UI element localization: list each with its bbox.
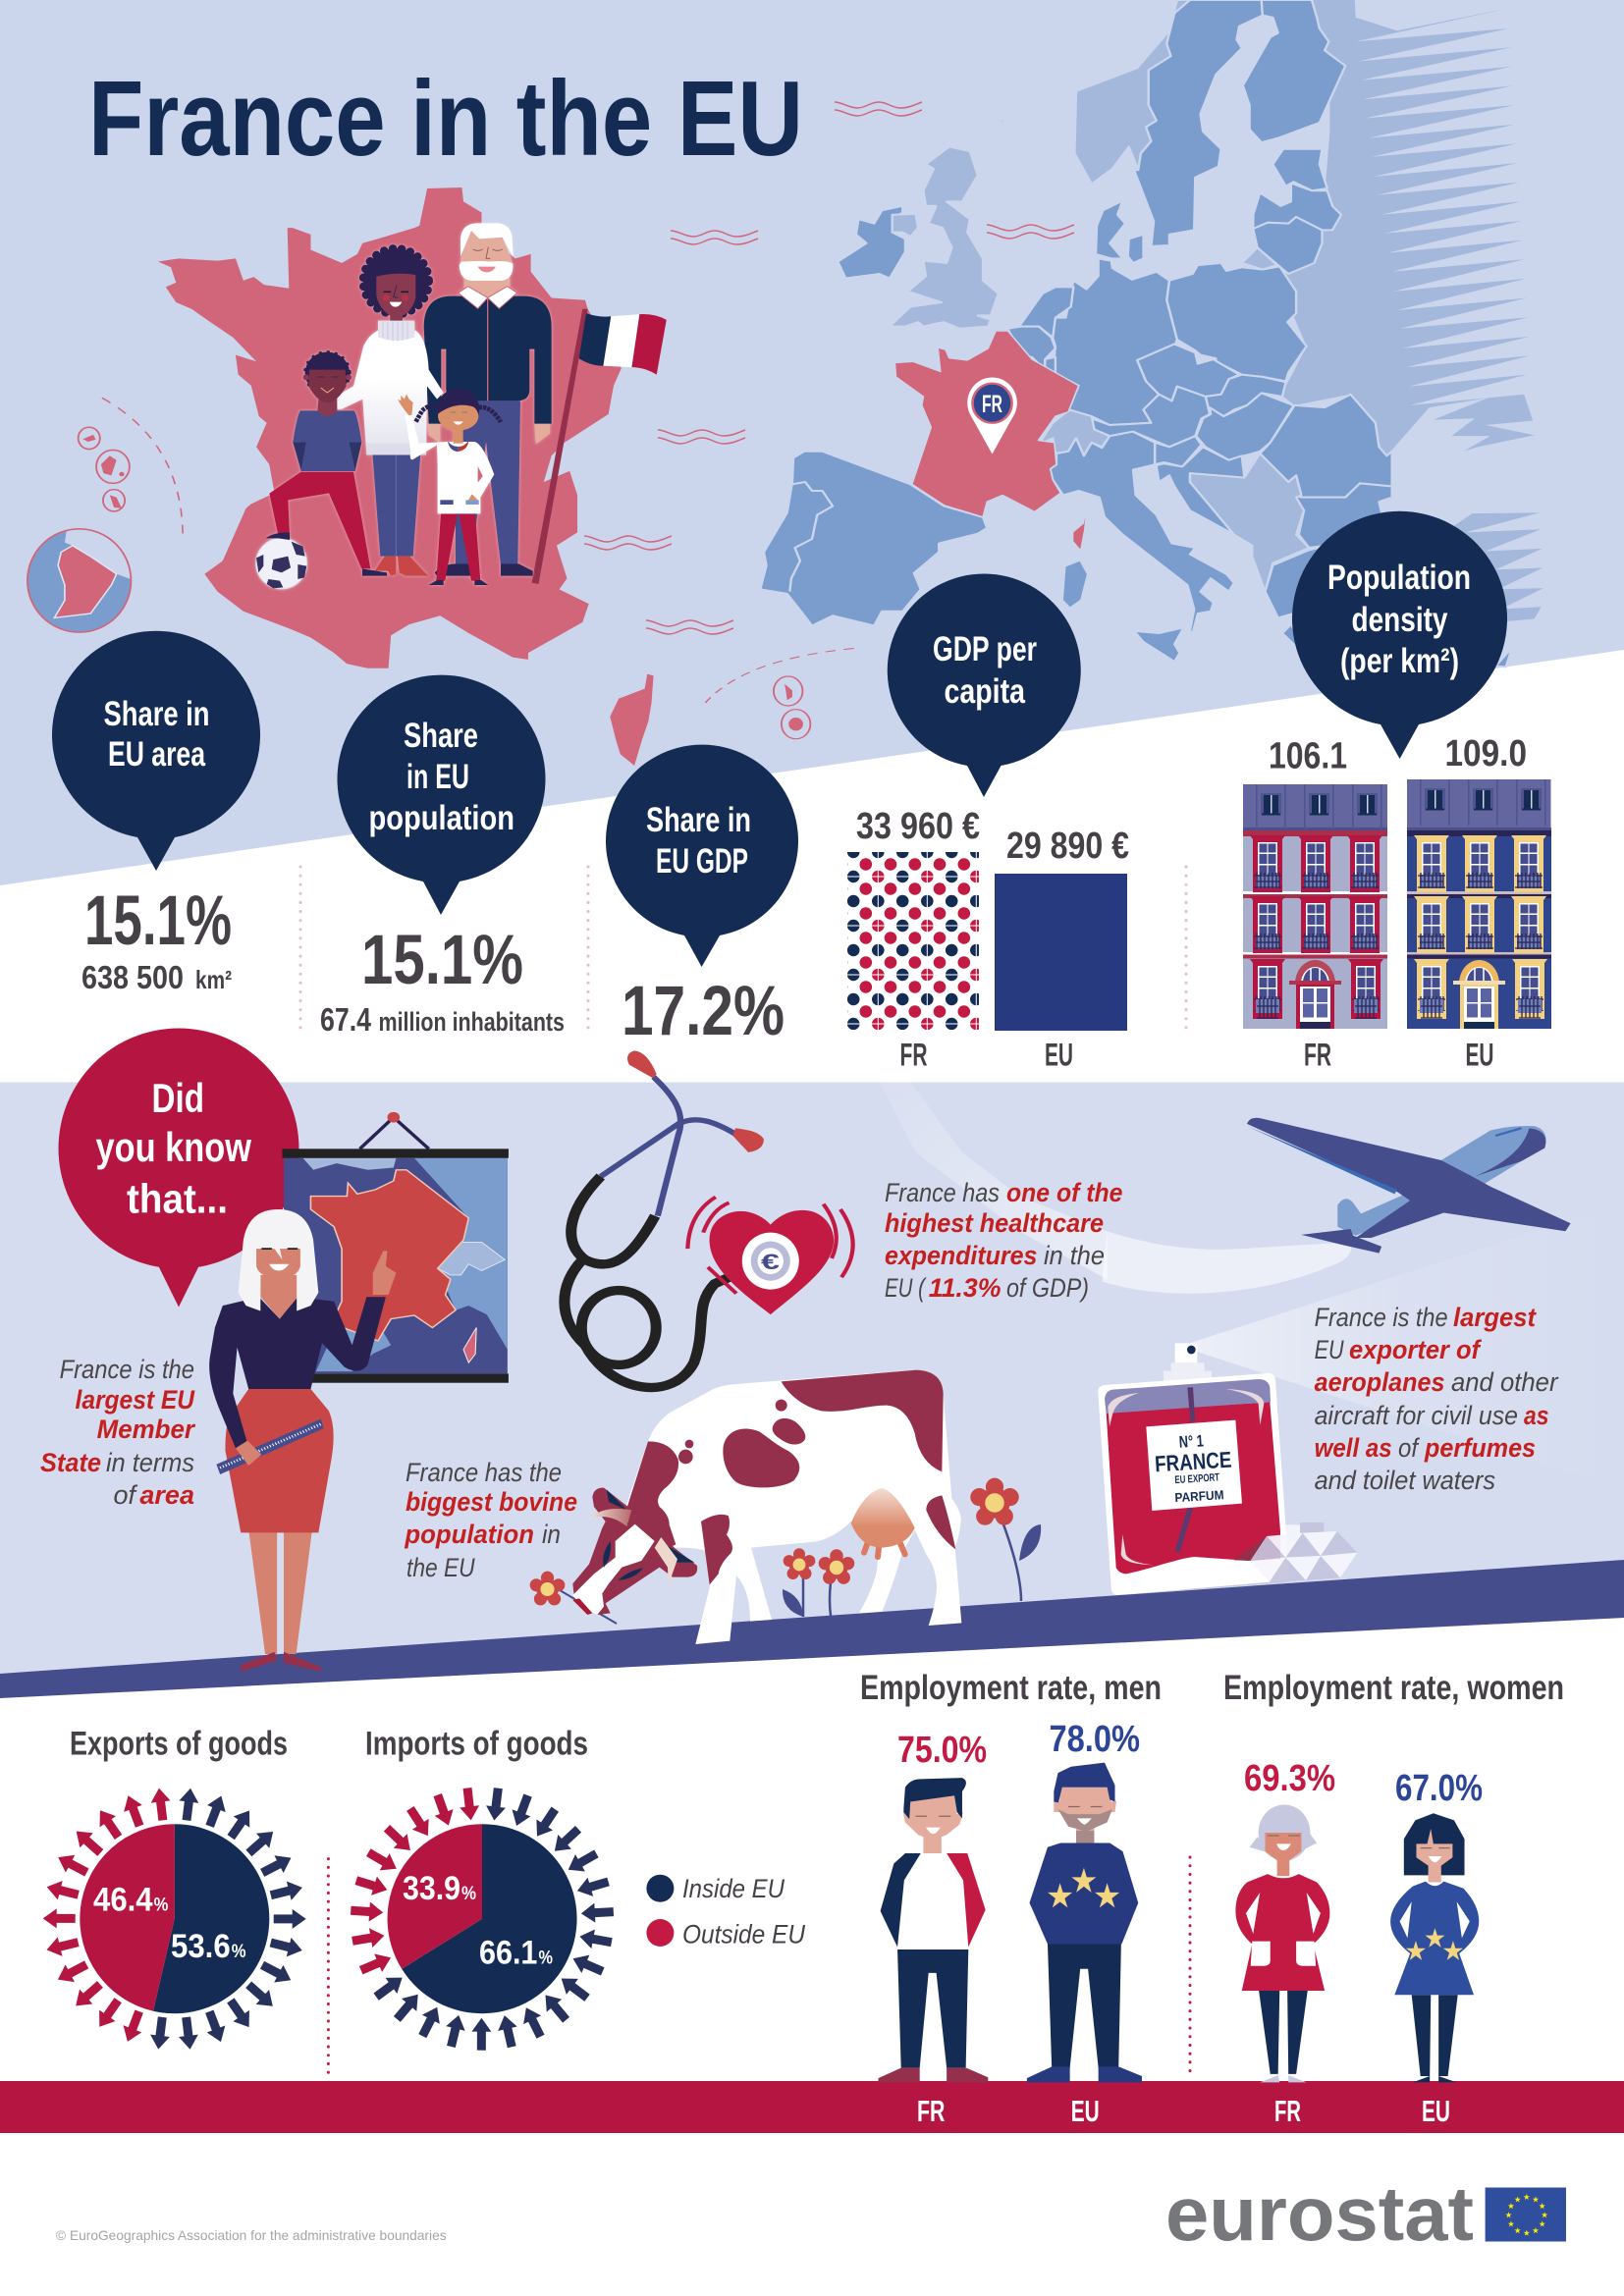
heart with euro xyxy=(687,1197,853,1314)
Turkey hatched edge xyxy=(1454,512,1543,622)
udder xyxy=(851,1488,915,1557)
perfume label text: FRANCE xyxy=(1154,1447,1232,1476)
Baltic states xyxy=(1253,149,1341,274)
bar chart: GDP per capita: 29 890 € xyxy=(1006,826,1129,867)
pie chart: exports: % xyxy=(154,1895,168,1916)
bubble: share in EU area: EU area xyxy=(108,735,205,774)
bubble: share in EU GDP: EU GDP xyxy=(656,842,748,881)
legend: Inside EU xyxy=(682,1874,785,1903)
fact: healthcare expenditures: of GDP) xyxy=(1006,1273,1089,1303)
labels on base bar: EU xyxy=(1422,2094,1450,2128)
flag pole xyxy=(532,309,588,584)
flowers xyxy=(530,1478,1041,1617)
bubble: did you know that: Did xyxy=(151,1075,204,1121)
bubble: share in EU GDP xyxy=(606,745,798,967)
background: top panel xyxy=(0,0,1624,885)
stat: 15.1% area: 638 500 xyxy=(81,959,184,995)
Corsica xyxy=(610,674,654,766)
stat: 15.1% area xyxy=(81,882,232,995)
bubble: did you know that xyxy=(59,1029,298,1308)
non-EU countries: Norway xyxy=(1074,0,1190,184)
bubble: did you know that: that... xyxy=(127,1176,228,1221)
metropolitan France xyxy=(158,187,622,668)
stat: 15.1% area: km² xyxy=(195,965,232,994)
mother xyxy=(334,248,444,576)
value: women EU: 67.0% xyxy=(1395,1768,1483,1809)
fact: largest member state: in terms xyxy=(106,1448,194,1477)
fact: biggest bovine population: in xyxy=(542,1520,561,1549)
pie chart: exports: % xyxy=(232,1942,246,1962)
bubble: share in EU population: in EU xyxy=(406,758,469,796)
perfume label text xyxy=(1153,1430,1234,1506)
bubble: GDP per capita xyxy=(888,574,1081,797)
pie chart: imports: % xyxy=(461,1884,476,1904)
fact: largest member state: France is the xyxy=(60,1355,194,1384)
bar: EU xyxy=(995,874,1127,1031)
fact: biggest bovine population xyxy=(404,1458,577,1582)
value: women FR: 69.3% xyxy=(1244,1758,1335,1799)
decorative waves xyxy=(584,102,1074,634)
fact: healthcare expenditures: EU ( xyxy=(885,1273,927,1303)
fact: biggest bovine population: population xyxy=(404,1520,534,1549)
building: FR xyxy=(1243,784,1387,1029)
fact: healthcare expenditures: one of the xyxy=(1006,1178,1122,1207)
Central Europe countries xyxy=(1092,344,1512,667)
fact: aeroplanes and perfumes: and toilet waters xyxy=(1315,1466,1495,1495)
bubble: did you know that: you know xyxy=(96,1124,251,1170)
left flower stem xyxy=(560,1590,617,1624)
Corsica and far overseas insets xyxy=(610,648,859,766)
girl xyxy=(398,389,501,585)
building chart: population density: FR xyxy=(1304,1037,1331,1072)
heading: exports of goods: Exports of goods xyxy=(70,1726,288,1763)
stat: 17.2% GDP: 17.2% xyxy=(622,973,785,1050)
fact: aeroplanes and perfumes xyxy=(1315,1303,1558,1495)
icon: EU flag xyxy=(1486,2187,1566,2242)
fact: largest member state: area xyxy=(139,1480,194,1510)
heading: imports of goods: Imports of goods xyxy=(365,1726,588,1763)
pie chart: imports: % xyxy=(538,1949,553,1969)
stat: 15.1% area: 15.1% xyxy=(84,882,232,960)
bar chart: GDP per capita xyxy=(847,806,1129,1072)
crystal base xyxy=(1185,1522,1324,1590)
stat: 15.1% population: 67.4 xyxy=(320,1001,372,1038)
perfume label text: EU EXPORT xyxy=(1174,1471,1220,1486)
Caribbean insets xyxy=(79,398,183,537)
fact: aeroplanes and perfumes: well as xyxy=(1315,1433,1392,1463)
nozzle xyxy=(1164,1343,1212,1381)
title: France in the EU xyxy=(88,59,803,179)
legend xyxy=(646,1874,805,1949)
bubble: population density: Population xyxy=(1327,559,1471,597)
cow xyxy=(572,1370,961,1644)
grandfather xyxy=(424,223,552,576)
location pin xyxy=(967,377,1017,454)
perfume label text: N° 1 xyxy=(1178,1431,1204,1452)
teacher xyxy=(209,1209,396,1672)
pie chart: imports: 33.9 xyxy=(403,1870,460,1907)
labels on base bar: EU xyxy=(1071,2094,1100,2128)
pie chart: exports: 53.6 xyxy=(171,1928,231,1965)
stethoscope xyxy=(565,1050,764,1387)
fact: largest member state xyxy=(40,1355,195,1510)
bubble: GDP per capita: GDP per xyxy=(933,630,1037,668)
fact: healthcare expenditures: highest healthcare xyxy=(885,1208,1104,1238)
Benelux xyxy=(1007,287,1073,372)
white below ground band xyxy=(0,1618,1624,1708)
outside EU slice xyxy=(388,1824,482,1969)
pin label: FR xyxy=(982,391,1002,418)
flower left of cow xyxy=(530,1572,565,1605)
wall map poster xyxy=(282,1112,509,1383)
Western Balkans xyxy=(1190,454,1309,592)
aeroplane xyxy=(1247,1118,1571,1254)
pie chart: imports xyxy=(351,1787,614,2051)
labels on base bar: FR xyxy=(1274,2094,1301,2128)
bar chart: GDP per capita: 33 960 € xyxy=(856,806,980,847)
perfume label text: PARFUM xyxy=(1174,1487,1224,1505)
fact: aeroplanes and perfumes: perfumes xyxy=(1424,1433,1536,1463)
Russia, Belarus, Ukraine with hatched eastern edge xyxy=(1278,0,1535,455)
legend: Outside EU xyxy=(682,1920,805,1949)
bubble: share in EU area xyxy=(52,631,260,871)
Sweden xyxy=(1134,0,1263,246)
perfume bottle xyxy=(1098,1343,1357,1595)
fact: aeroplanes and perfumes: exporter of xyxy=(1349,1335,1483,1364)
fact: biggest bovine population: France has the xyxy=(406,1458,562,1487)
Poland xyxy=(1166,263,1307,381)
boy with football xyxy=(256,352,387,589)
bubble: share in EU population: Share xyxy=(404,717,478,755)
fact: largest member state: State xyxy=(40,1448,101,1477)
figure: woman EU xyxy=(1390,1813,1479,2082)
fact: healthcare expenditures xyxy=(885,1178,1122,1303)
Germany xyxy=(1052,258,1177,425)
Denmark xyxy=(1096,200,1144,263)
pie chart: exports: 46.4 xyxy=(93,1881,153,1918)
value: men FR: 75.0% xyxy=(897,1730,987,1771)
background: did you know panel xyxy=(0,1082,1624,1692)
stat: 15.1% population xyxy=(320,922,565,1038)
crimson base bar xyxy=(0,2081,1624,2133)
building: EU xyxy=(1407,779,1551,1029)
fact: healthcare expenditures: in the xyxy=(1044,1241,1105,1270)
building chart: population density: 109.0 xyxy=(1445,733,1527,774)
fact: healthcare expenditures: France has xyxy=(885,1178,1000,1207)
Switzerland xyxy=(1038,409,1110,455)
flowers under cow xyxy=(783,1548,854,1617)
fact: aeroplanes and perfumes: France is the xyxy=(1315,1303,1448,1332)
map of Europe xyxy=(760,0,1543,667)
fact: aeroplanes and perfumes: of xyxy=(1398,1433,1420,1463)
labels on base bar: FR xyxy=(917,2094,945,2128)
fact: biggest bovine population: biggest bovine xyxy=(406,1487,577,1517)
Spain and Portugal xyxy=(760,452,987,625)
contrail and perfume spray xyxy=(880,1082,1624,1490)
outside EU slice xyxy=(80,1824,175,2011)
Corsica small xyxy=(1073,517,1085,549)
cow body xyxy=(625,1370,961,1644)
Italy with islands xyxy=(1051,432,1234,662)
United Kingdom xyxy=(890,115,1004,329)
stat: 15.1% population: million inhabitants xyxy=(379,1007,565,1037)
figure: man EU xyxy=(1027,1763,1142,2082)
bubble: share in EU area: Share in xyxy=(104,695,210,733)
copyright note: © EuroGeographics Association for the administrative boundaries xyxy=(56,2227,447,2243)
bar: FR patterned xyxy=(847,852,979,1030)
French Guiana inset xyxy=(26,526,135,635)
cow head xyxy=(572,1488,697,1615)
fact: largest member state: largest EU xyxy=(75,1385,195,1415)
eurostat wordmark: eurostat xyxy=(1165,2170,1474,2257)
bubble: population density: density xyxy=(1351,601,1448,639)
heading: employment rate men: Employment rate, men xyxy=(860,1669,1162,1707)
bubble: population density: (per km²) xyxy=(1340,642,1459,680)
French flag xyxy=(579,313,667,375)
building chart: population density xyxy=(1243,733,1551,1072)
fact: healthcare expenditures: expenditures xyxy=(885,1241,1037,1270)
inside EU slice xyxy=(402,1824,577,2013)
fact: healthcare expenditures: 11.3% xyxy=(929,1273,1001,1303)
pie chart: exports xyxy=(43,1787,306,2051)
cow markings xyxy=(626,1370,955,1584)
figure: man FR xyxy=(879,1778,988,2082)
bubble: share in EU population xyxy=(338,675,546,915)
building chart: population density: 106.1 xyxy=(1269,736,1347,777)
ground band xyxy=(0,1560,1624,1698)
Finland xyxy=(1243,0,1345,142)
crystal facets xyxy=(1234,1531,1357,1582)
value: men EU: 78.0% xyxy=(1049,1719,1140,1760)
bubble: share in EU population: population xyxy=(369,799,514,837)
fact: aeroplanes and perfumes: aircraft for civil use xyxy=(1315,1401,1518,1430)
flower right of cow xyxy=(970,1478,1041,1601)
building chart: population density: EU xyxy=(1465,1037,1494,1072)
labels on base bar xyxy=(917,2094,1450,2128)
fact: aeroplanes and perfumes: aeroplanes xyxy=(1315,1367,1445,1397)
bar chart: GDP per capita: FR xyxy=(899,1037,927,1072)
fact: aeroplanes and perfumes: EU xyxy=(1315,1335,1344,1364)
bubble: share in EU GDP: Share in xyxy=(646,801,751,839)
fact: largest member state: Member xyxy=(97,1415,195,1444)
fact: aeroplanes and perfumes: and other xyxy=(1451,1367,1558,1397)
fact: largest member state: of xyxy=(114,1480,137,1510)
Mayotte and Reunion insets xyxy=(705,648,859,739)
bubble: GDP per capita: capita xyxy=(945,672,1025,711)
fact: biggest bovine population: the EU xyxy=(406,1553,475,1582)
stat: 15.1% population: 15.1% xyxy=(361,922,523,999)
arrows inward xyxy=(351,1787,614,2051)
inside EU slice xyxy=(153,1824,269,2013)
family xyxy=(256,223,552,589)
Ireland xyxy=(838,206,905,278)
map of France with overseas territories xyxy=(26,187,667,668)
euro sign on heart: € xyxy=(761,1250,780,1274)
bubble: population density xyxy=(1292,511,1507,759)
bar chart: GDP per capita: EU xyxy=(1045,1037,1073,1072)
fact: aeroplanes and perfumes: as xyxy=(1524,1401,1549,1430)
fact: aeroplanes and perfumes: largest xyxy=(1453,1303,1537,1332)
figure: woman FR xyxy=(1235,1804,1329,2082)
France highlighted xyxy=(894,331,1079,517)
pie chart: imports: 66.1 xyxy=(479,1935,537,1972)
arrows outward xyxy=(43,1787,306,2051)
